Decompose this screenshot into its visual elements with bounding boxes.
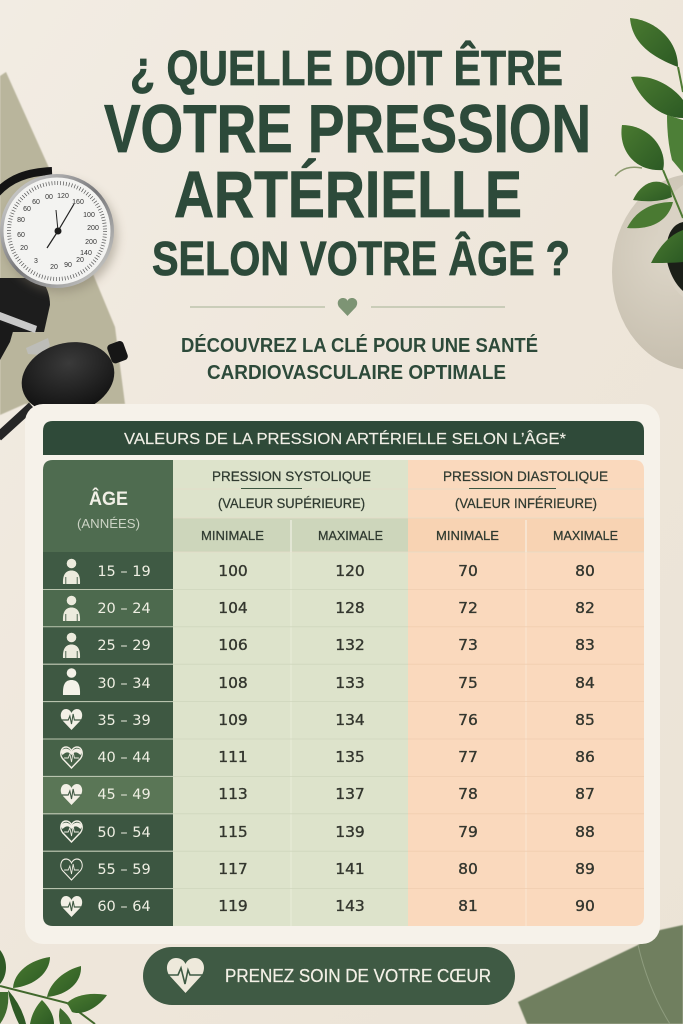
diastolic values: 76 [458,711,478,729]
illustration: blood pressure cuff and gauge: 60 [32,199,40,206]
systolic header: PRESSION SYSTOLIQUE [212,469,371,484]
illustration: blood pressure cuff and gauge: 60 [17,232,25,239]
systolic header: (VALEUR SUPÉRIEURE) [218,496,365,511]
age range labels: 60 – 64 [97,899,151,915]
icon: heart with pulse [167,958,204,993]
illustration: blood pressure cuff and gauge: 20 [76,257,84,264]
diastolic header: PRESSION DIASTOLIQUE [443,469,608,484]
systolic values: 108 [218,674,248,692]
icon: person 25-29 [63,633,80,658]
systolic header [201,469,383,543]
panel: systolic column background [173,460,408,926]
systolic values: 109 [218,711,248,729]
icon: heart 50-54 [61,821,82,842]
systolic values: 135 [335,748,365,766]
diastolic values: 78 [458,785,478,803]
age range labels: 55 – 59 [97,862,151,878]
age range labels: 40 – 44 [97,750,151,766]
illustration: inflation bulb [0,332,129,437]
diastolic values: 81 [458,897,478,915]
illustration: blood pressure cuff and gauge: 00 [45,194,53,201]
age range labels: 35 – 39 [97,713,151,729]
icon: person 20-24 [63,596,80,621]
diastolic values: 80 [575,562,595,580]
illustration: blood pressure cuff and gauge: 60 [23,206,31,213]
systolic values: 134 [335,711,365,729]
systolic values: 143 [335,897,365,915]
icon: heart 45-49 [61,784,82,805]
age range labels: 25 – 29 [97,638,151,654]
illustration: blood pressure cuff and gauge: 3 [34,258,38,265]
age column rows [43,552,173,926]
divider with heart [190,298,505,316]
table grid lines [173,489,644,926]
systolic values: 113 [218,785,248,803]
illustration: blood pressure cuff and gauge: 200 [85,239,97,246]
systolic values: 128 [335,599,365,617]
age column header [43,460,173,552]
age column header: ÂGE [89,488,128,510]
subtitle [181,334,538,384]
diastolic header: MAXIMALE [553,529,618,543]
subtitle: DÉCOUVREZ LA CLÉ POUR UNE SANTÉ [181,334,538,357]
illustration: blood pressure cuff and gauge: 120 [57,193,69,200]
age range labels: 15 – 19 [97,564,151,580]
diastolic values: 72 [458,599,478,617]
panel: table card [25,404,660,944]
systolic values [218,562,365,915]
diastolic values: 90 [575,897,595,915]
diastolic values: 87 [575,785,595,803]
systolic values: 132 [335,636,365,654]
illustration: blood pressure cuff and gauge: 140 [80,250,92,257]
diastolic values: 82 [575,599,595,617]
diastolic values: 80 [458,860,478,878]
diastolic header [436,469,618,543]
systolic values: 106 [218,636,248,654]
call to action button [143,947,515,1005]
systolic values: 111 [218,748,248,766]
illustration: beige cloth under the gauge [0,72,125,415]
illustration: blood pressure cuff and gauge: 20 [50,264,58,271]
illustration: blood pressure cuff and gauge: 200 [87,225,99,232]
title: SELON VOTRE ÂGE ? [152,231,570,286]
systolic values: 115 [218,823,248,841]
diastolic values: 89 [575,860,595,878]
panel: diastolic column background [408,460,644,926]
diastolic values: 75 [458,674,478,692]
title [104,41,591,286]
illustration: blood pressure cuff and gauge: 100 [83,212,95,219]
illustration: green cloth bottom right [518,925,683,1024]
age range labels: 20 – 24 [97,601,151,617]
systolic values: 139 [335,823,365,841]
diastolic values: 86 [575,748,595,766]
systolic values: 133 [335,674,365,692]
diastolic values: 85 [575,711,595,729]
icon: heart 40-44 [61,747,82,768]
diastolic values [458,562,595,915]
systolic header: MINIMALE [201,529,264,543]
title: ¿ QUELLE DOIT ÊTRE [130,41,563,96]
illustration: blood pressure cuff and gauge: 20 [20,245,28,252]
systolic header: MAXIMALE [318,529,383,543]
diastolic values: 77 [458,748,478,766]
table title bar: VALEURS DE LA PRESSION ARTÉRIELLE SELON L’ÂGE* [124,429,566,448]
systolic values: 100 [218,562,248,580]
systolic values: 117 [218,860,248,878]
age range labels: 30 – 34 [97,676,151,692]
illustration: blood pressure cuff and gauge: 90 [64,262,72,269]
diastolic header: MINIMALE [436,529,499,543]
illustration: potted plant [612,18,683,370]
icon: person filled 30-34 [63,668,80,695]
icon: heart 60-64 [61,896,82,917]
illustration: blood pressure cuff and gauge: 160 [72,199,84,206]
systolic values: 119 [218,897,248,915]
age range labels: 50 – 54 [97,825,151,841]
icon: person 15-19 [63,559,80,584]
icon: heart 35-39 [61,709,82,730]
systolic values: 104 [218,599,248,617]
diastolic header: (VALEUR INFÉRIEURE) [455,496,597,511]
diastolic values: 83 [575,636,595,654]
age range labels [97,564,151,915]
illustration: blood pressure cuff and gauge [0,171,117,360]
call to action button: PRENEZ SOIN DE VOTRE CŒUR [225,966,491,986]
diastolic values: 70 [458,562,478,580]
diastolic values: 73 [458,636,478,654]
illustration: blood pressure cuff and gauge: 80 [17,217,25,224]
age column header: (ANNÉES) [77,516,140,531]
systolic values: 120 [335,562,365,580]
systolic values: 141 [335,860,365,878]
diastolic values: 84 [575,674,595,692]
subtitle: CARDIOVASCULAIRE OPTIMALE [207,362,506,384]
age range labels: 45 – 49 [97,787,151,803]
diastolic values: 88 [575,823,595,841]
title: ARTÉRIELLE [174,157,522,231]
systolic values: 137 [335,785,365,803]
icon: heart 55-59 [61,859,82,880]
table title bar [43,421,644,455]
illustration: leaves bottom left [0,950,107,1024]
diastolic values: 79 [458,823,478,841]
